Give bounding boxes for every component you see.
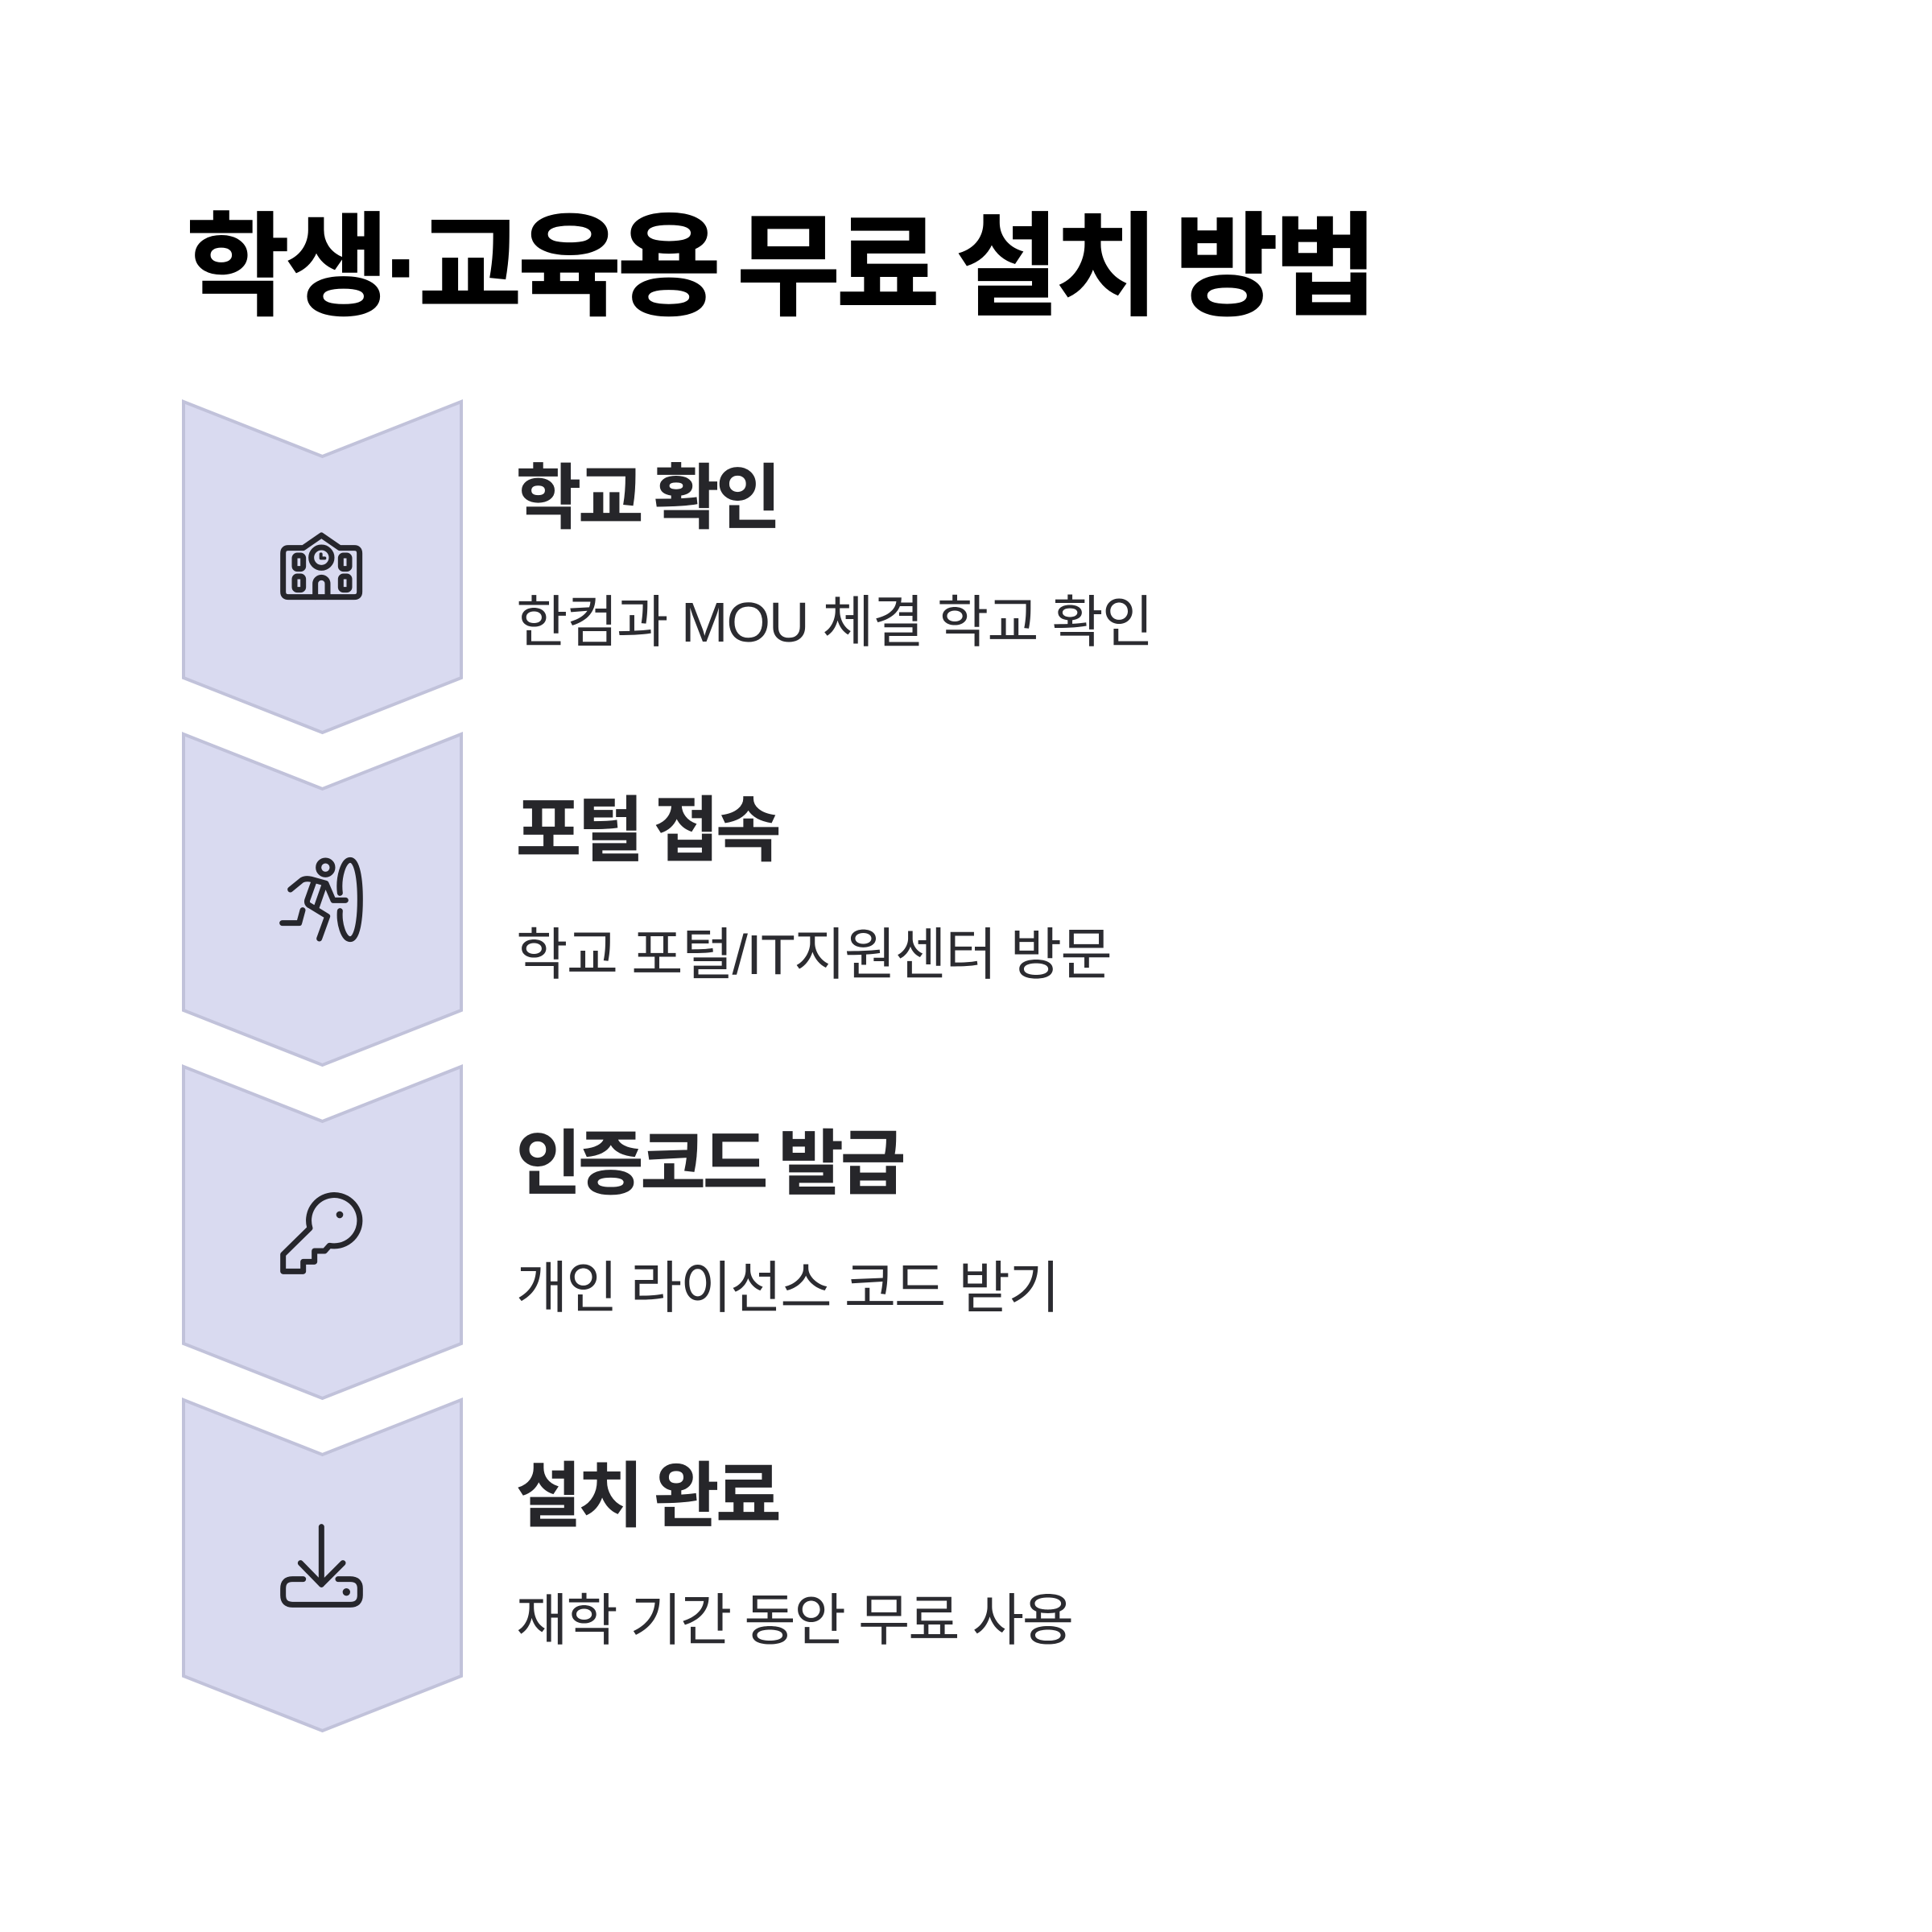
icon: key: [283, 1195, 360, 1271]
chevron: step 4: [184, 1400, 461, 1731]
chevron: step 1: [184, 402, 461, 733]
step 2 description: 학교 포털/IT지원센터 방문: [516, 923, 1111, 986]
title: 학생·교육용 무료 설치 방법: [186, 204, 1373, 330]
step 1 description: 한컴과 MOU 체결 학교 확인: [516, 591, 1152, 654]
chevron: step 2: [184, 734, 461, 1065]
step 4 heading: 설치 완료: [516, 1456, 778, 1536]
step 3 description: 개인 라이선스 코드 받기: [516, 1257, 1059, 1319]
step 1 heading: 학교 확인: [516, 458, 778, 538]
step 2 heading: 포털 접속: [516, 791, 778, 870]
icon: person running through a portal: [283, 860, 360, 939]
icon: download to drive: [283, 1527, 360, 1604]
step 3 heading: 인증코드 발급: [516, 1124, 903, 1203]
step 4 description: 재학 기간 동안 무료 사용: [516, 1589, 1072, 1652]
icon: school: [283, 535, 360, 597]
chevron: step 3: [184, 1067, 461, 1398]
